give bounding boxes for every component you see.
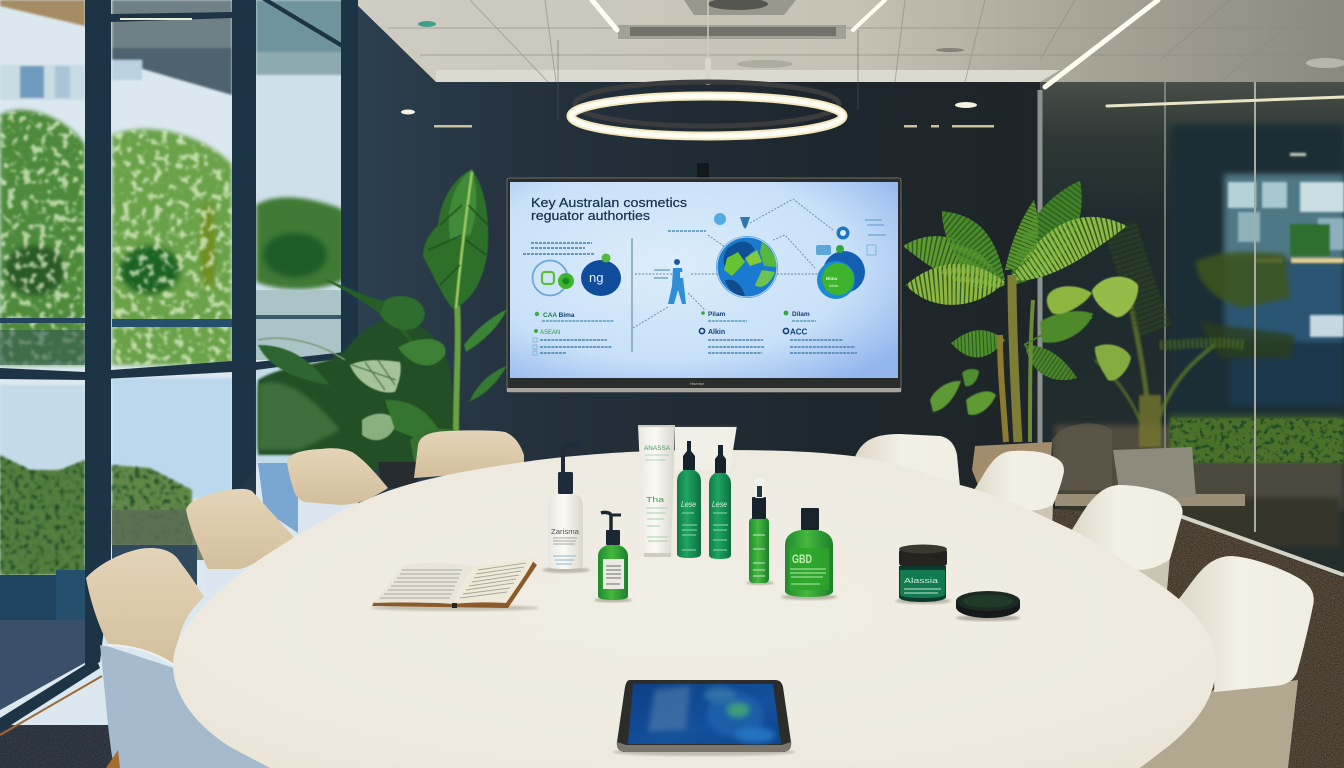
screen right column text: [783, 311, 857, 353]
tablet: [612, 680, 796, 756]
reflected office windows: [1228, 153, 1344, 337]
display screen: [507, 163, 901, 392]
carpet floors: [0, 494, 1344, 768]
large green bottle: [781, 508, 837, 600]
blue pot: [258, 463, 298, 533]
ring pendant light: [558, 0, 858, 136]
tall green bottle 2: Lese: [712, 500, 727, 509]
view outside: building and sky: [0, 0, 344, 498]
right glass partition: [1040, 0, 1344, 578]
small green pump bottle: [594, 512, 632, 602]
plant seen through window: [258, 345, 330, 385]
palm frond bases: [903, 181, 1127, 380]
bush behind table: [258, 319, 460, 470]
screen divider and dashed connectors: [632, 199, 833, 352]
wall spotlights: [401, 102, 994, 128]
large round leaves: [930, 277, 1138, 415]
left potted plant: [258, 169, 507, 533]
screen right column text: ACC: [790, 328, 808, 336]
reflected planter: [1113, 447, 1196, 497]
left window wall: [0, 0, 358, 735]
right palm plant: [903, 181, 1138, 495]
screen title: [531, 195, 688, 223]
screen right emblem: [668, 213, 886, 299]
tree canopies through glass: [0, 110, 344, 365]
screen right emblem: Aktia: [829, 283, 839, 288]
screen left column text: ASEAN: [540, 330, 560, 336]
slim green spray bottle: [746, 478, 774, 585]
large green bottle: GBD: [792, 552, 812, 566]
tall green bottle 2: [709, 445, 731, 559]
palm frond stripes: [903, 181, 1127, 442]
terracotta planter: [972, 442, 1052, 495]
open book: [371, 558, 539, 611]
screen middle column text: Pilam: [708, 311, 726, 318]
display screen: Hisense: [690, 381, 705, 386]
reflected plant in glass: [1095, 225, 1245, 447]
conference table: [173, 450, 1216, 768]
screen title: reguator authorties: [531, 208, 651, 223]
shrubs and planters: [0, 455, 256, 710]
screen left column text: CAA Bima: [543, 312, 575, 319]
back wall: [340, 0, 1060, 520]
jar lid: [956, 591, 1020, 621]
white tube back: [675, 425, 737, 470]
chairs behind table: [86, 430, 1314, 768]
green jar: Alassia: [904, 578, 938, 585]
wall mount: [697, 163, 709, 179]
screen left emblems: [523, 243, 621, 296]
screen globe: [716, 236, 778, 298]
chair: right front: [1067, 485, 1183, 591]
ceiling light strips: [592, 0, 1344, 106]
white tube front: [638, 425, 675, 557]
white pump bottle: [542, 445, 590, 573]
reflected hedge: [1170, 418, 1344, 463]
screen person figure: [654, 259, 690, 304]
white tube front: Tha: [646, 497, 664, 504]
screen right emblem: Bima: [826, 276, 838, 281]
ceiling vents: [618, 0, 846, 39]
reflected chair: [1052, 423, 1112, 490]
screen left emblems: ng: [589, 270, 603, 285]
screen middle column text: [699, 311, 765, 353]
chair: right mid: [972, 451, 1064, 529]
screen middle column text: Alkin: [708, 329, 725, 336]
screen title: Key Australan cosmetics: [531, 195, 688, 210]
white pump bottle: Zarisma: [551, 527, 580, 536]
chair: left mid: [287, 448, 388, 534]
white tube front: ANASSA: [644, 446, 670, 452]
chair: near left: [86, 548, 275, 768]
ceiling: [352, 0, 1344, 106]
chair: left front: [186, 489, 294, 593]
balcony rail: [0, 318, 85, 323]
screen right column text: Dilam: [792, 311, 810, 318]
tall green bottle 1: [677, 441, 701, 558]
screen left column text: [533, 312, 614, 355]
window frames: [0, 0, 358, 732]
chair: near right: [1140, 556, 1314, 768]
tall green bottle 1: Lese: [681, 500, 696, 509]
chair: back right: [855, 434, 960, 487]
green jar: [895, 544, 951, 604]
variegated leaf: [350, 360, 401, 393]
chair: back left: [414, 430, 524, 478]
